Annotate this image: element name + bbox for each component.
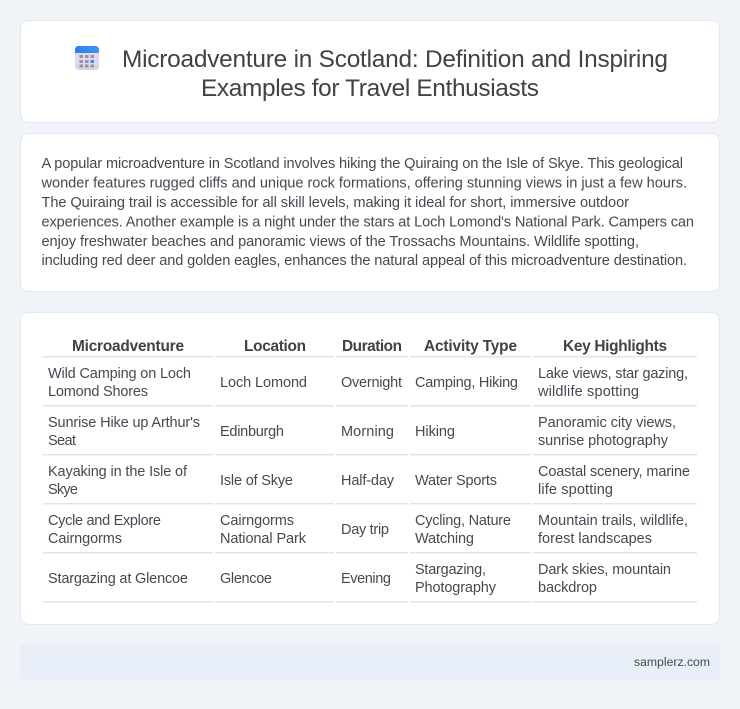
title: Microadventure in Scotland: Definition and Inspiring xyxy=(122,46,668,73)
row: stargazing xyxy=(43,562,697,602)
row: kayaking: Skye xyxy=(48,482,78,498)
text block: description paragraph xyxy=(40,156,694,269)
row: stargazing: backdrop xyxy=(538,580,597,596)
row: sunrise hike: Edinburgh xyxy=(220,424,284,440)
row: cycle cairngorms xyxy=(43,513,697,554)
row: kayaking: Isle of Skye xyxy=(220,473,293,489)
row: kayaking: life spotting xyxy=(538,482,613,498)
row: stargazing: Dark skies, mountain xyxy=(538,562,671,578)
table header row: Microadventure xyxy=(72,338,184,355)
row: cycle cairngorms: Day trip xyxy=(341,522,389,538)
row: kayaking: Water Sports xyxy=(415,473,497,489)
text block: description paragraph: experiences. Another example is a night under the stars at Loch Lomond's National Park. Campers can xyxy=(42,214,694,230)
table header row xyxy=(43,338,697,358)
row: wild camping: Lomond Shores xyxy=(48,384,148,400)
row: kayaking: Half-day xyxy=(341,473,395,489)
row: stargazing: Stargazing, xyxy=(415,562,486,578)
row: sunrise hike: Panoramic city views, xyxy=(538,415,676,431)
text block: description paragraph: wonder features rugged cliffs and unique rock formations, offering stunning views in just a few hours. xyxy=(40,176,687,192)
footer: samplerz.com xyxy=(634,655,710,669)
row: sunrise hike xyxy=(43,415,697,456)
row: sunrise hike: Sunrise Hike up Arthur's xyxy=(48,415,200,431)
row: stargazing: Evening xyxy=(341,571,391,587)
row: sunrise hike: Morning xyxy=(341,424,394,440)
row: cycle cairngorms: National Park xyxy=(220,531,307,547)
row: stargazing: Photography xyxy=(415,580,497,596)
row: wild camping xyxy=(43,366,697,406)
row: wild camping: Loch Lomond xyxy=(220,375,307,391)
table header row: Key Highlights xyxy=(563,338,667,355)
row: cycle cairngorms: Cycle and Explore xyxy=(48,513,161,529)
row: kayaking xyxy=(43,464,697,504)
text block: description paragraph: enjoy freshwater beaches and panoramic views of the Trossachs Mountains. Wildlife spotting, xyxy=(42,234,639,250)
row: cycle cairngorms: forest landscapes xyxy=(538,531,652,547)
row: cycle cairngorms: Cycling, Nature xyxy=(415,513,511,529)
title: Examples for Travel Enthusiasts xyxy=(201,75,539,102)
row: wild camping: wildlife spotting xyxy=(537,384,639,400)
row: cycle cairngorms: Watching xyxy=(415,531,474,547)
panel: table card xyxy=(20,312,720,624)
footer xyxy=(20,645,720,679)
row: stargazing: Glencoe xyxy=(220,571,272,587)
row: kayaking: Kayaking in the Isle of xyxy=(48,464,188,480)
panel: title card xyxy=(20,20,720,122)
table: microadventures xyxy=(43,338,697,602)
icon: calendar xyxy=(75,46,99,70)
text block: description paragraph: A popular microadventure in Scotland involves hiking the Quiraing on the Isle of Skye. This geological xyxy=(42,156,683,172)
row: wild camping: Wild Camping on Loch xyxy=(48,366,191,382)
table header row: Duration xyxy=(342,338,402,355)
panel: introduction xyxy=(20,134,720,292)
row: stargazing: Stargazing at Glencoe xyxy=(48,571,188,587)
row: kayaking: Coastal scenery, marine xyxy=(538,464,690,480)
row: wild camping: Overnight xyxy=(341,375,402,391)
table header row: Activity Type xyxy=(424,338,517,355)
table header row: Location xyxy=(244,338,306,355)
title xyxy=(122,46,668,102)
row: cycle cairngorms: Cairngorms xyxy=(220,513,294,529)
row: cycle cairngorms: Cairngorms xyxy=(48,531,122,547)
row: wild camping: Camping, Hiking xyxy=(415,375,518,391)
text block: description paragraph: including red deer and golden eagles, enhances the natural appeal of this microadventure destination. xyxy=(42,253,687,269)
row: sunrise hike: Seat xyxy=(48,433,76,449)
row: cycle cairngorms: Mountain trails, wildlife, xyxy=(538,513,688,529)
row: wild camping: Lake views, star gazing, xyxy=(538,366,688,382)
text block: description paragraph: The Quiraing trail is accessible for all skill levels, making it ideal for short, immersive outdoor xyxy=(42,195,629,211)
row: sunrise hike: sunrise photography xyxy=(538,433,669,449)
row: sunrise hike: Hiking xyxy=(415,424,455,440)
